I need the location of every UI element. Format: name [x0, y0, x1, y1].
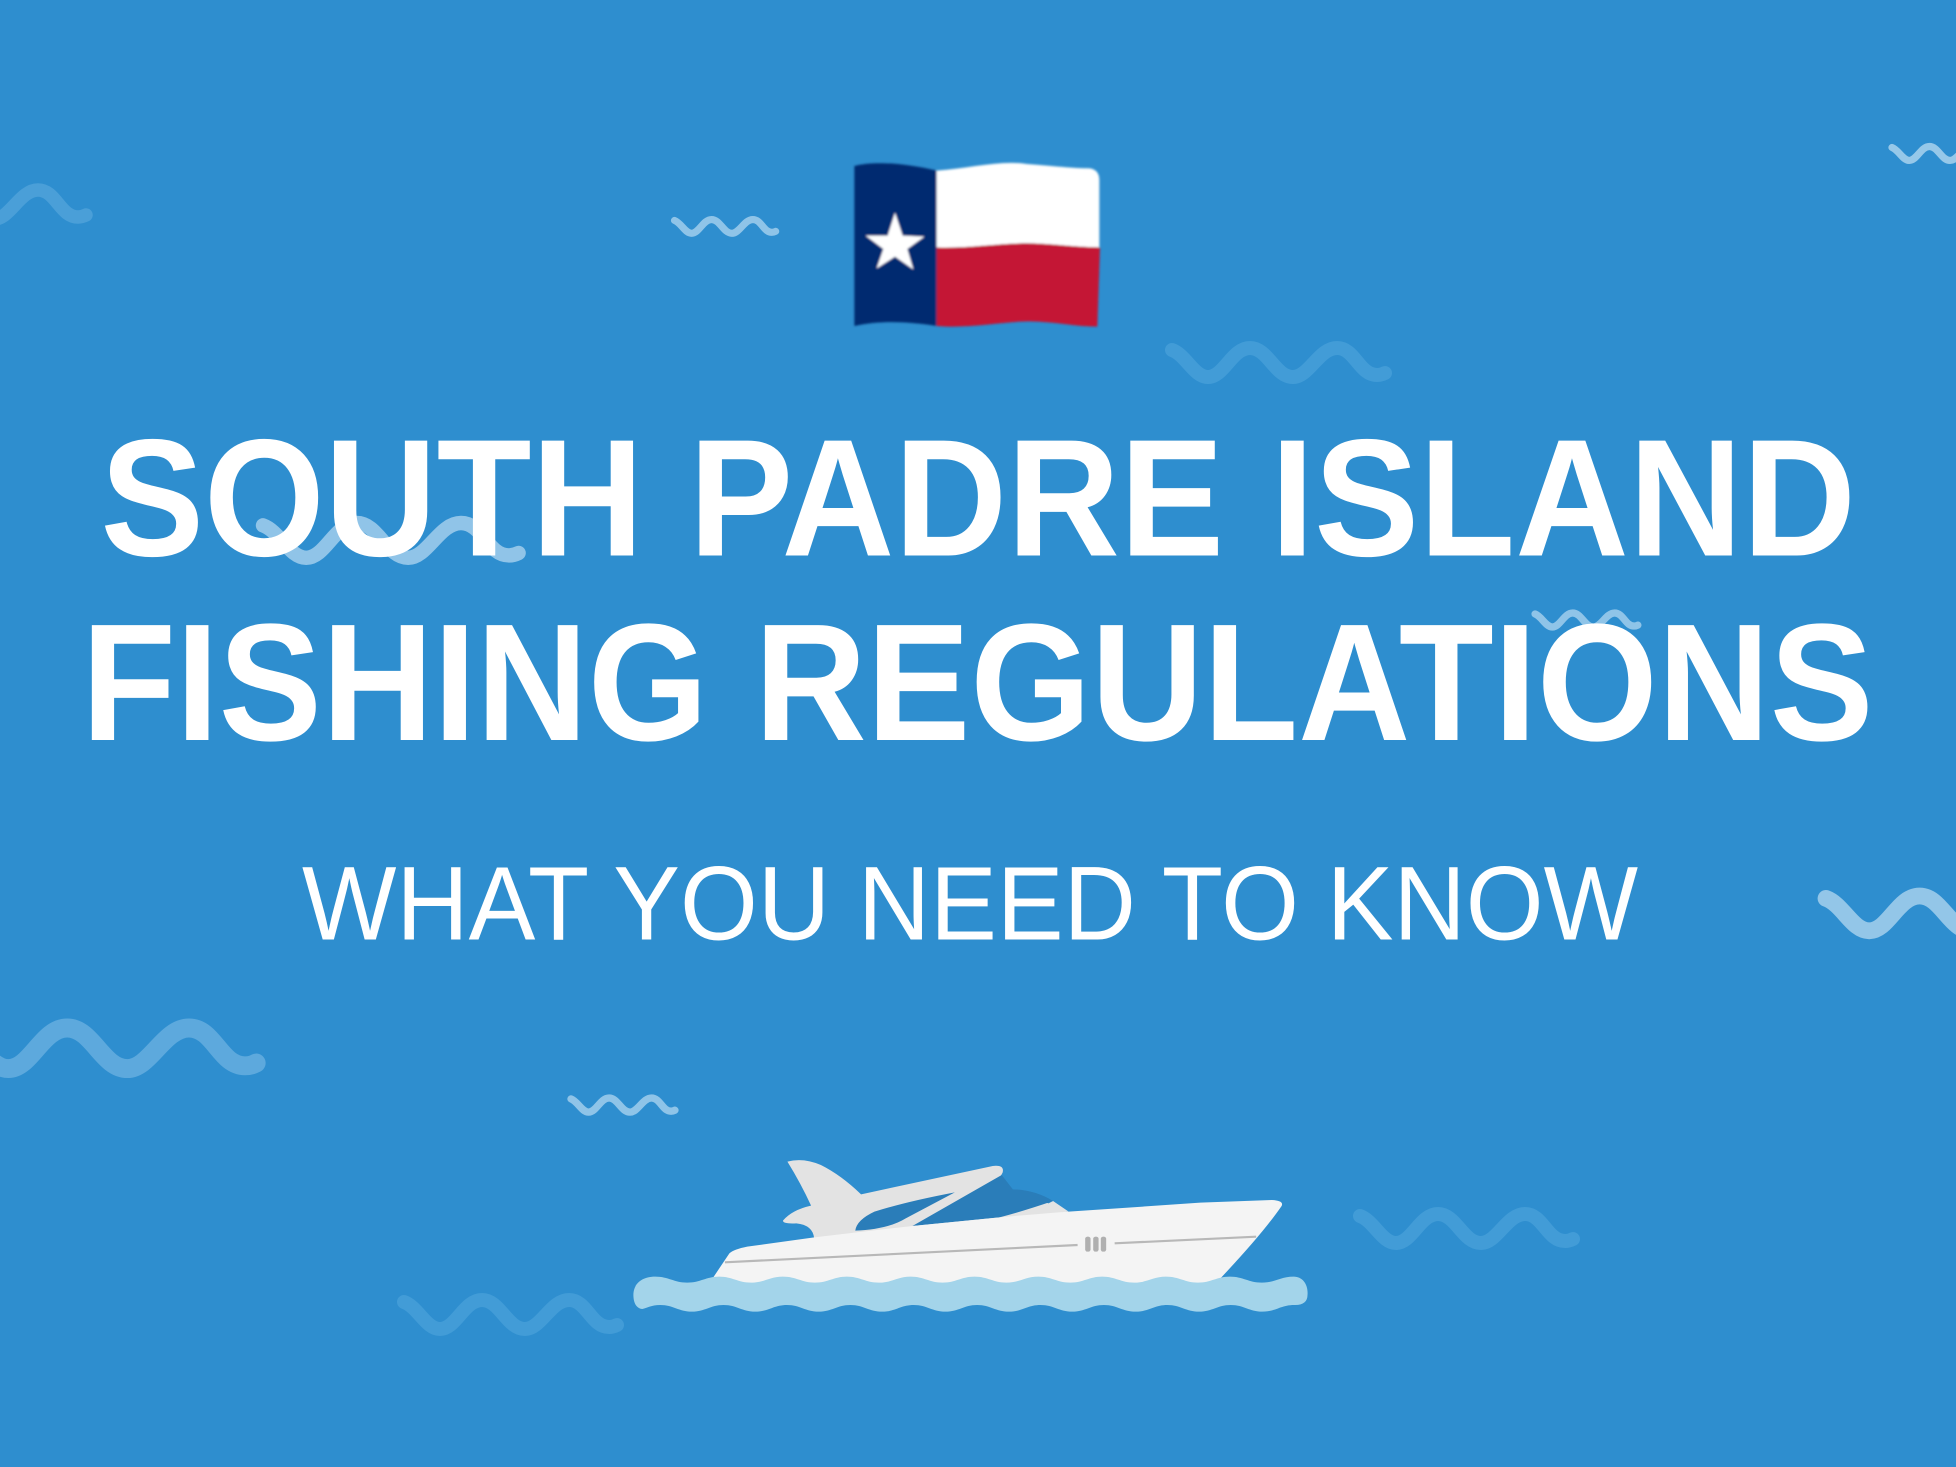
- yacht stripe: [725, 1237, 1256, 1262]
- icon: motor yacht on water: [633, 1160, 1308, 1312]
- yacht windows: [855, 1175, 1053, 1231]
- icon: Texas flag: [854, 163, 1100, 327]
- yacht vents: [1085, 1237, 1106, 1252]
- yacht cabin: [783, 1160, 1069, 1238]
- water wave: [633, 1277, 1308, 1312]
- yacht hull: [712, 1200, 1282, 1287]
- title: REGULATIONS: [754, 590, 1874, 776]
- subtitle: WHAT YOU NEED TO KNOW: [302, 846, 1638, 962]
- title: FISHING: [82, 590, 708, 776]
- title: SOUTH: [100, 406, 644, 592]
- title: [82, 406, 1874, 776]
- title: ISLAND: [1270, 406, 1856, 592]
- title: PADRE: [689, 406, 1224, 592]
